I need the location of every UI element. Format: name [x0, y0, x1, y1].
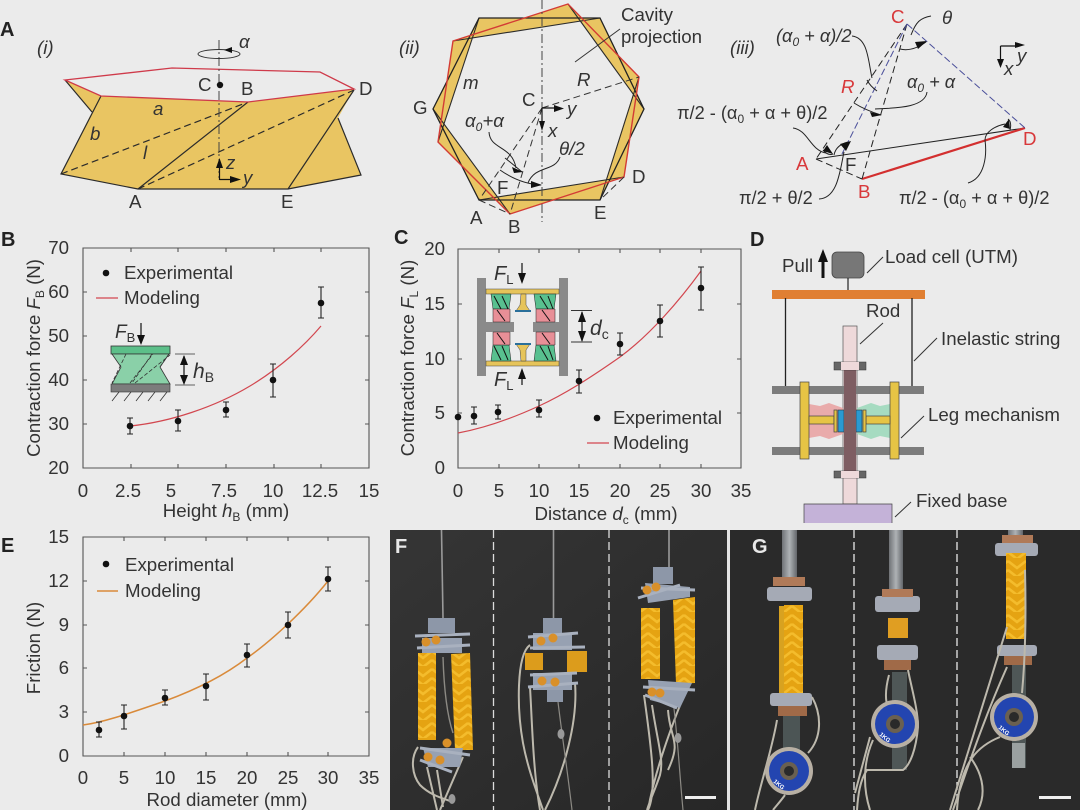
y tick labels: 0	[435, 457, 445, 478]
y tick labels: 50	[48, 325, 69, 346]
x axis title: (mm)	[629, 503, 678, 524]
modeling curve	[83, 581, 328, 725]
y tick labels	[424, 238, 445, 478]
cavity projection hexagon	[444, 21, 633, 197]
left angle label: 0	[737, 112, 744, 126]
right angle label: π/2 - (α	[899, 188, 959, 208]
panel letter F: F	[395, 536, 407, 558]
panel B: contraction force vs height chart	[1, 229, 379, 524]
cavity projection label line 2: projection	[621, 26, 702, 47]
angle arcs	[489, 132, 560, 185]
panel C: contraction force vs distance chart	[394, 227, 751, 527]
y tick labels: 3	[59, 701, 69, 722]
pi/2 theta label: π/2 + θ/2	[739, 188, 813, 208]
vertex labels: b	[90, 123, 100, 144]
panel A (ii): top view hexagons	[399, 0, 702, 237]
red side B-D	[862, 128, 1025, 179]
label (i): (i)	[37, 37, 54, 58]
callout labels: Leg mechanism	[928, 404, 1060, 425]
callout labels: Inelastic string	[941, 328, 1060, 349]
vertex labels: a	[153, 98, 163, 119]
origami fold lines	[61, 80, 361, 189]
leg 3	[638, 567, 695, 810]
legend: Experimental	[613, 407, 722, 428]
upper gray bar	[772, 386, 924, 394]
vertex labels: B	[508, 216, 520, 237]
inset: bellows block: B	[127, 330, 135, 345]
point C	[198, 74, 223, 95]
panel G: photos of rod climbing contraction	[730, 530, 1080, 810]
origami body	[61, 80, 361, 189]
y axis title: Contraction force F	[23, 298, 44, 457]
panel letter G: G	[752, 536, 768, 558]
curved leaders	[793, 16, 1005, 199]
panel A (iii): geometry triangle	[677, 6, 1049, 211]
y tick labels: 6	[59, 657, 69, 678]
x tick labels: 12.5	[302, 480, 338, 501]
scale bar	[1039, 796, 1071, 799]
vertex labels: D	[632, 166, 646, 187]
blue dashed lines	[842, 24, 1025, 154]
inset: leg mechanism compression diagram	[477, 263, 609, 393]
y axis title: Contraction force F	[397, 297, 418, 456]
axis x y: y	[565, 98, 578, 119]
y tick labels	[48, 526, 69, 766]
left angle label: π/2 - (α	[677, 103, 737, 123]
alpha0+alpha label: + α	[924, 72, 956, 92]
F label: F	[845, 154, 856, 175]
y tick labels: 9	[59, 614, 69, 635]
y tick labels: 10	[424, 348, 445, 369]
x tick labels: 20	[610, 480, 630, 501]
vertex labels: G	[413, 97, 428, 118]
legend	[96, 262, 233, 308]
x axis title: Rod diameter (mm)	[147, 789, 307, 810]
blue contact pads	[838, 410, 862, 432]
label (ii): (ii)	[399, 37, 420, 58]
red top hexagon	[438, 4, 639, 214]
y axis title: B	[33, 290, 47, 298]
rotation axis	[218, 40, 220, 178]
x axis title: B	[232, 510, 240, 524]
point C: C	[198, 74, 212, 95]
vertex labels: E	[594, 202, 606, 223]
x tick labels: 10	[529, 480, 549, 501]
x tick labels: 15	[196, 767, 216, 788]
legend: Modeling	[613, 432, 689, 453]
inset: leg mechanism compression diagram: F	[494, 369, 506, 391]
vertex labels	[90, 78, 372, 212]
y tick labels: 20	[424, 238, 445, 259]
modeling curve	[130, 326, 321, 426]
axes frame and ticks	[458, 249, 741, 468]
x tick labels: 5	[119, 767, 129, 788]
alpha0+alpha label: α	[907, 72, 917, 92]
y tick labels: 30	[48, 413, 69, 434]
mini axes: y	[1015, 45, 1028, 66]
inset: bellows block: F	[115, 322, 127, 343]
y tick labels: 40	[48, 369, 69, 390]
vertex labels: C	[522, 89, 536, 110]
vertex labels: A	[470, 207, 483, 228]
pull arrow: Pull	[782, 255, 813, 276]
error bars	[96, 567, 331, 737]
x tick labels: 2.5	[115, 480, 141, 501]
vertex labels: E	[281, 191, 293, 212]
vertex labels: F	[497, 177, 508, 198]
red top hexagon	[65, 68, 354, 102]
x tick labels	[78, 767, 379, 788]
climber 2	[855, 530, 920, 810]
legend: Experimental	[125, 554, 234, 575]
photo background	[730, 530, 1080, 810]
alpha0+alpha label: +α	[482, 110, 505, 131]
x tick labels: 10	[155, 767, 175, 788]
dashed radii	[479, 77, 639, 214]
half angle label: + α)/2	[799, 26, 851, 46]
dashed creases	[61, 90, 354, 189]
legend	[587, 407, 722, 453]
half angle label: (α	[776, 26, 793, 46]
panel D: test setup schematic	[750, 229, 1060, 523]
x tick labels: 15	[359, 480, 379, 501]
rotation arrow alpha	[198, 31, 251, 58]
y tick labels: 12	[48, 570, 69, 591]
x tick labels: 15	[569, 480, 589, 501]
alpha0+alpha label: 0	[917, 81, 924, 95]
y tick labels: 15	[48, 526, 69, 547]
y tick labels: 0	[59, 745, 69, 766]
callout labels	[866, 246, 1060, 511]
legend: Modeling	[125, 580, 201, 601]
x tick labels: 0	[78, 480, 88, 501]
vertex labels: m	[463, 72, 479, 93]
mini axes	[997, 42, 1028, 79]
y axis title: (N)	[397, 260, 418, 291]
half angle label: 0	[792, 35, 799, 49]
climber 1	[755, 530, 819, 810]
x tick labels: 5	[494, 480, 504, 501]
rod collars	[834, 362, 866, 478]
x tick labels: 0	[453, 480, 463, 501]
panel letter C: C	[394, 227, 408, 249]
centre axis and radii	[541, 0, 543, 222]
x tick labels: 30	[691, 480, 711, 501]
callout labels: Load cell (UTM)	[885, 246, 1018, 267]
panel E: friction vs rod diameter chart	[1, 526, 379, 810]
mini axes: x	[1003, 58, 1014, 79]
orange bar	[772, 290, 925, 299]
pull arrow	[782, 249, 828, 278]
lower gray bar	[772, 447, 924, 455]
theta label: θ	[942, 7, 952, 28]
x tick labels: 10	[263, 480, 283, 501]
black base hexagon	[433, 18, 644, 200]
label (iii): (iii)	[730, 37, 755, 58]
x tick labels: 25	[278, 767, 298, 788]
rod	[843, 326, 857, 504]
error bars	[127, 287, 324, 434]
x tick labels: 20	[237, 767, 257, 788]
x tick labels	[78, 480, 379, 501]
x tick labels: 5	[166, 480, 176, 501]
x axis title: Height h	[163, 500, 232, 521]
red vertex labels: B	[858, 181, 870, 202]
red vertex labels: R	[841, 76, 854, 97]
y tick labels: 5	[435, 402, 445, 423]
leg folds left	[809, 403, 843, 439]
vertex labels: R	[577, 69, 590, 90]
cavity projection label: Cavity	[621, 4, 674, 25]
x tick labels: 7.5	[211, 480, 237, 501]
right angle label: 0	[959, 197, 966, 211]
photo background	[390, 530, 727, 810]
climber 3: 1KG	[997, 725, 1010, 738]
z y axes: y	[241, 167, 254, 188]
axes frame and ticks	[83, 537, 369, 756]
inset: leg mechanism compression diagram: L	[506, 272, 513, 287]
inset: leg mechanism compression diagram: L	[506, 378, 513, 393]
vertex labels: A	[129, 191, 142, 212]
callout labels: Fixed base	[916, 490, 1007, 511]
leader lines	[860, 257, 937, 517]
axes frame and ticks	[83, 248, 369, 468]
climber 2: 1KG	[878, 732, 891, 745]
inset: leg mechanism compression diagram: d	[590, 317, 602, 340]
alpha0+alpha label: α	[465, 110, 476, 131]
panel letter B: B	[1, 229, 15, 251]
inset: bellows block	[111, 322, 214, 401]
climber 1: 1KG	[772, 779, 785, 792]
fixed base	[804, 504, 892, 523]
leg folds right	[857, 403, 890, 439]
data points	[455, 285, 704, 420]
vertex labels: l	[143, 142, 148, 163]
dashed separators	[494, 530, 609, 810]
red vertex labels: A	[796, 153, 809, 174]
x tick labels: 30	[318, 767, 338, 788]
legend	[97, 554, 234, 601]
black dashed lines	[816, 24, 907, 179]
z y axes: z	[225, 152, 236, 173]
x tick labels: 0	[78, 767, 88, 788]
load cell connector	[847, 278, 849, 293]
panel letter D: D	[750, 229, 764, 251]
dark rod section	[844, 370, 856, 471]
angle arcs	[823, 42, 1011, 155]
panel letter E: E	[1, 535, 14, 557]
load cell	[832, 252, 864, 278]
panel A (i): twisted origami unit side view	[0, 19, 372, 212]
legend: Experimental	[124, 262, 233, 283]
dashed separators	[854, 530, 957, 810]
leg 1	[413, 618, 473, 810]
strings	[442, 530, 669, 618]
red vertex labels	[796, 6, 1036, 202]
alpha0+alpha label: 0	[476, 120, 483, 134]
vertex labels: D	[359, 78, 372, 99]
y axis title: L	[407, 290, 421, 297]
theta/2 label: θ/2	[559, 138, 585, 159]
y axis title: (N)	[23, 259, 44, 290]
solid side A-D	[816, 128, 1025, 159]
x tick labels	[453, 480, 751, 501]
z y axes	[216, 152, 254, 188]
black fold lines	[433, 4, 644, 214]
right angle label: + α + θ)/2	[966, 188, 1049, 208]
axis x y	[539, 98, 578, 141]
inset: bellows block: h	[193, 360, 205, 383]
y tick labels: 20	[48, 457, 69, 478]
callout labels: Rod	[866, 300, 900, 321]
x axis title: Distance d	[534, 503, 623, 524]
yellow plates	[800, 382, 899, 459]
cavity leader	[575, 29, 620, 62]
data points	[127, 300, 324, 429]
leg 2	[519, 618, 587, 810]
arrow heads	[823, 41, 1010, 154]
red vertex labels: C	[891, 6, 904, 27]
vertex labels: B	[241, 78, 253, 99]
yellow bands	[433, 4, 644, 214]
climber 3	[950, 530, 1038, 810]
error bars	[471, 267, 704, 424]
inset: bellows block: B	[205, 369, 214, 385]
panel F: photos of leg mechanism contraction	[390, 530, 727, 810]
y tick labels: 60	[48, 281, 69, 302]
x axis title: (mm)	[240, 500, 289, 521]
x tick labels: 35	[359, 767, 379, 788]
left angle label: + α + θ)/2	[744, 103, 827, 123]
arc arrow heads	[512, 167, 542, 188]
y axis title: Friction (N)	[23, 602, 44, 694]
x tick labels: 35	[731, 480, 751, 501]
data points	[96, 576, 331, 733]
y tick labels	[48, 237, 69, 478]
legend: Modeling	[124, 287, 200, 308]
panel letter A: A	[0, 19, 14, 41]
y tick labels: 15	[424, 293, 445, 314]
strings	[786, 298, 912, 386]
axis x y: x	[547, 120, 558, 141]
x axis title: c	[623, 513, 629, 527]
rotation arrow alpha: α	[239, 31, 251, 52]
modeling curve	[458, 271, 701, 433]
x tick labels: 25	[650, 480, 670, 501]
y tick labels: 70	[48, 237, 69, 258]
red vertex labels: D	[1023, 128, 1036, 149]
scale bar	[685, 796, 716, 799]
inset: leg mechanism compression diagram: c	[602, 326, 609, 342]
vertex labels	[413, 69, 646, 237]
inset: leg mechanism compression diagram: F	[494, 263, 506, 285]
gap between photos	[727, 530, 730, 810]
